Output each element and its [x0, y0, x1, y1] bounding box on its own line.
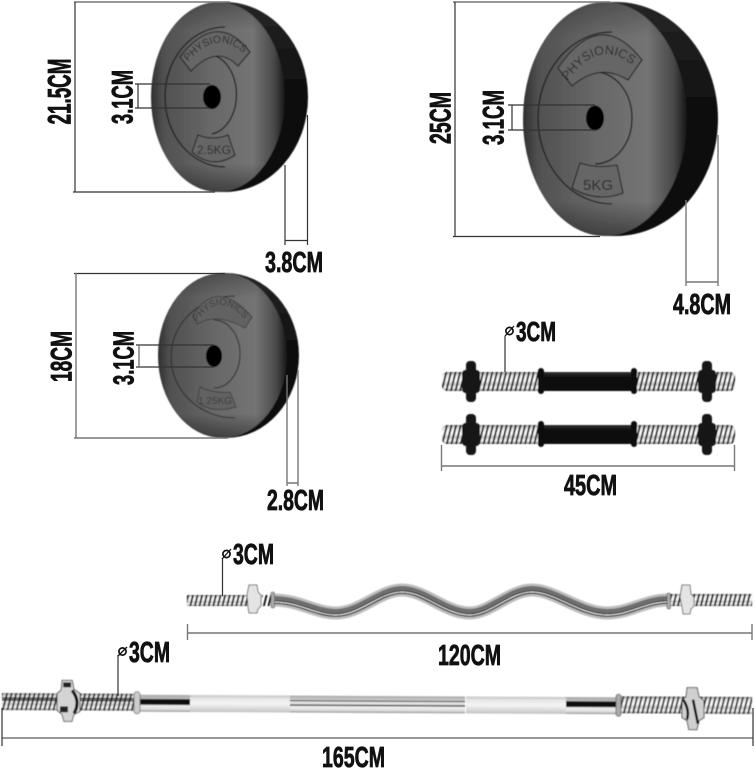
- label: 3.1CM bore, 5 kg plate: 3.1CM: [478, 90, 510, 145]
- plate 2.5 kg raised ring: [165, 27, 236, 167]
- label: 120CM: 120CM: [438, 640, 501, 672]
- dimension lines: 2.5 kg plate: [73, 2, 308, 245]
- plate 2.5 kg weight banner: [192, 135, 235, 162]
- barbell collars: [134, 692, 140, 714]
- barbell right nut: [682, 688, 704, 730]
- plate 5 kg raised ring: [538, 32, 632, 204]
- EZ bar curved chrome shaft: [273, 590, 668, 615]
- dumbbell bar: upper: [442, 361, 735, 402]
- label: 3.8CM thickness: 3.8CM: [265, 247, 323, 279]
- plate 5 kg weight text: 5KG: [583, 177, 613, 194]
- barbell length dimension: [2, 737, 753, 739]
- barbell knurled white sections: [190, 695, 290, 713]
- dumbbell diameter leader: [504, 336, 506, 372]
- plate 2.5 kg rim: [218, 2, 308, 192]
- plate 5 kg brand banner: [558, 35, 642, 86]
- label: 3CM EZ bar diameter: 3CM: [233, 539, 274, 571]
- barbell left thread: [2, 693, 136, 711]
- label: 3.1CM bore, 1.25 kg plate: 3.1CM: [108, 331, 140, 385]
- EZ bar diameter icon: [222, 549, 231, 559]
- plate 5 kg rim: [605, 2, 718, 236]
- label: 45CM: 45CM: [564, 470, 617, 502]
- plate 1.25 kg brand banner: [193, 296, 252, 328]
- EZ bar diameter leader: [222, 558, 224, 596]
- plate 1.25 kg weight banner: [197, 387, 236, 410]
- barbell diameter leader: [117, 655, 119, 696]
- EZ bar length dimension: [188, 624, 752, 640]
- plate 1.25 kg face: [158, 273, 287, 438]
- plate 1.25 kg raised ring: [171, 296, 240, 418]
- label: 3.1CM bore, 2.5 kg plate: 3.1CM: [106, 70, 140, 124]
- dumbbell diameter icon: [505, 326, 514, 336]
- EZ bar right collar: [667, 593, 670, 609]
- plate 1.25 kg weight text: 1.25KG: [198, 396, 232, 407]
- label: 2.8CM thickness: 2.8CM: [267, 485, 324, 517]
- barbell shaft dark sections: [139, 695, 190, 712]
- EZ curl bar: [187, 585, 752, 615]
- plate: 2.5 kg: [150, 1, 309, 193]
- plate: 5 kg: [522, 1, 719, 237]
- plate 1.25 kg hole: [206, 345, 222, 367]
- straight barbell: [2, 680, 752, 730]
- plate 2.5 kg brand text: PHYSIONICS: [183, 35, 247, 61]
- dumbbell bar: lower: [442, 414, 735, 455]
- EZ bar left collar: [247, 585, 261, 613]
- plate 5 kg face: [523, 2, 687, 236]
- plate 1.25 kg rim: [222, 273, 299, 438]
- plate 5 kg hole: [586, 106, 604, 130]
- plate 1.25 kg brand text: PHYSIONICS: [192, 298, 248, 321]
- plate 2.5 kg brand banner: [180, 32, 250, 71]
- barbell diameter icon: [118, 647, 127, 656]
- plate 2.5 kg hole: [203, 85, 221, 109]
- label: 18CM height: 18CM: [46, 331, 78, 382]
- barbell left nut: [57, 680, 80, 721]
- label: 3CM barbell diameter: 3CM: [129, 637, 170, 669]
- EZ bar right thread: [668, 594, 752, 606]
- plate: 1.25 kg: [157, 272, 300, 439]
- plate 5 kg brand text: PHYSIONICS: [562, 45, 636, 80]
- label: 25CM height: 25CM: [424, 92, 458, 144]
- barbell right thread: [620, 696, 752, 714]
- barbell dimension end ticks: [2, 708, 753, 746]
- dumbbell length dimension: [442, 445, 734, 471]
- dimension lines: 5 kg plate: [453, 2, 718, 286]
- plate 2.5 kg face: [151, 2, 285, 192]
- plate 5 kg weight banner: [572, 163, 623, 197]
- EZ bar left thread: [187, 595, 251, 606]
- plate 2.5 kg weight text: 2.5KG: [197, 143, 231, 157]
- dimension lines: 1.25 kg plate: [74, 273, 298, 486]
- label: 3CM dumbbell diameter: 3CM: [516, 316, 556, 347]
- label: 21.5CM height: 21.5CM: [42, 58, 78, 124]
